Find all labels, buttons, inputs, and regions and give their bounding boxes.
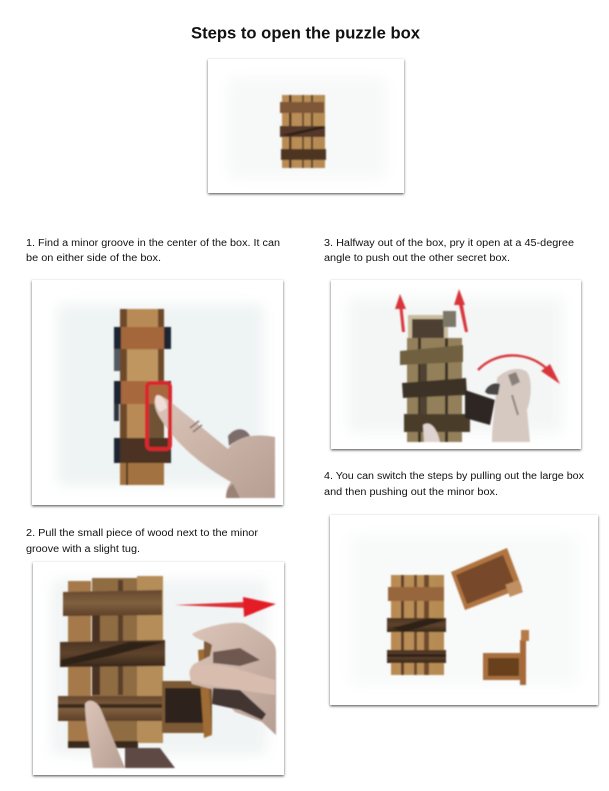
wooden box with secret drawer xyxy=(400,311,495,442)
small drawer with stick xyxy=(483,630,529,685)
step 3 text: angle to push out the other secret box. xyxy=(324,253,510,264)
step 4 text: 4. You can switch the steps by pulling out the large box xyxy=(324,471,584,482)
red highlight around groove xyxy=(147,383,170,449)
large wooden box xyxy=(387,575,446,675)
step 2 text xyxy=(26,528,259,555)
step 3 text xyxy=(324,238,574,264)
title: Steps to open the puzzle box xyxy=(191,24,421,42)
step 2 text: 2. Pull the small piece of wood next to the minor xyxy=(26,528,259,539)
step 1 text: be on either side of the box. xyxy=(26,253,161,264)
step 4 text: and then pushing out the minor box. xyxy=(324,487,498,498)
wooden box upright xyxy=(114,309,171,485)
photo: step 2 pulling wood piece xyxy=(33,562,284,775)
step 3 text: 3. Halfway out of the box, pry it open at a 45-degree xyxy=(324,238,574,249)
step 1 text xyxy=(26,238,280,264)
photo: step 4 disassembled box xyxy=(330,515,598,705)
hand holding drawer xyxy=(423,369,531,442)
arrows: up and curved xyxy=(395,289,560,384)
open drawer, rotated xyxy=(451,548,523,610)
photo: closed puzzle box xyxy=(208,59,404,193)
arrow: pull right xyxy=(175,597,276,617)
step 4 text xyxy=(324,471,584,498)
photo: step 3 prying open xyxy=(331,280,581,449)
step 1 text: 1. Find a minor groove in the center of the box. It can xyxy=(26,238,280,249)
photo: step 1 finger on groove xyxy=(32,280,283,505)
step 2 text: groove with a slight tug. xyxy=(26,544,140,555)
hand holding drawer xyxy=(85,623,276,768)
hand pointing xyxy=(155,395,275,498)
wooden box with drawer pulled xyxy=(58,576,212,748)
